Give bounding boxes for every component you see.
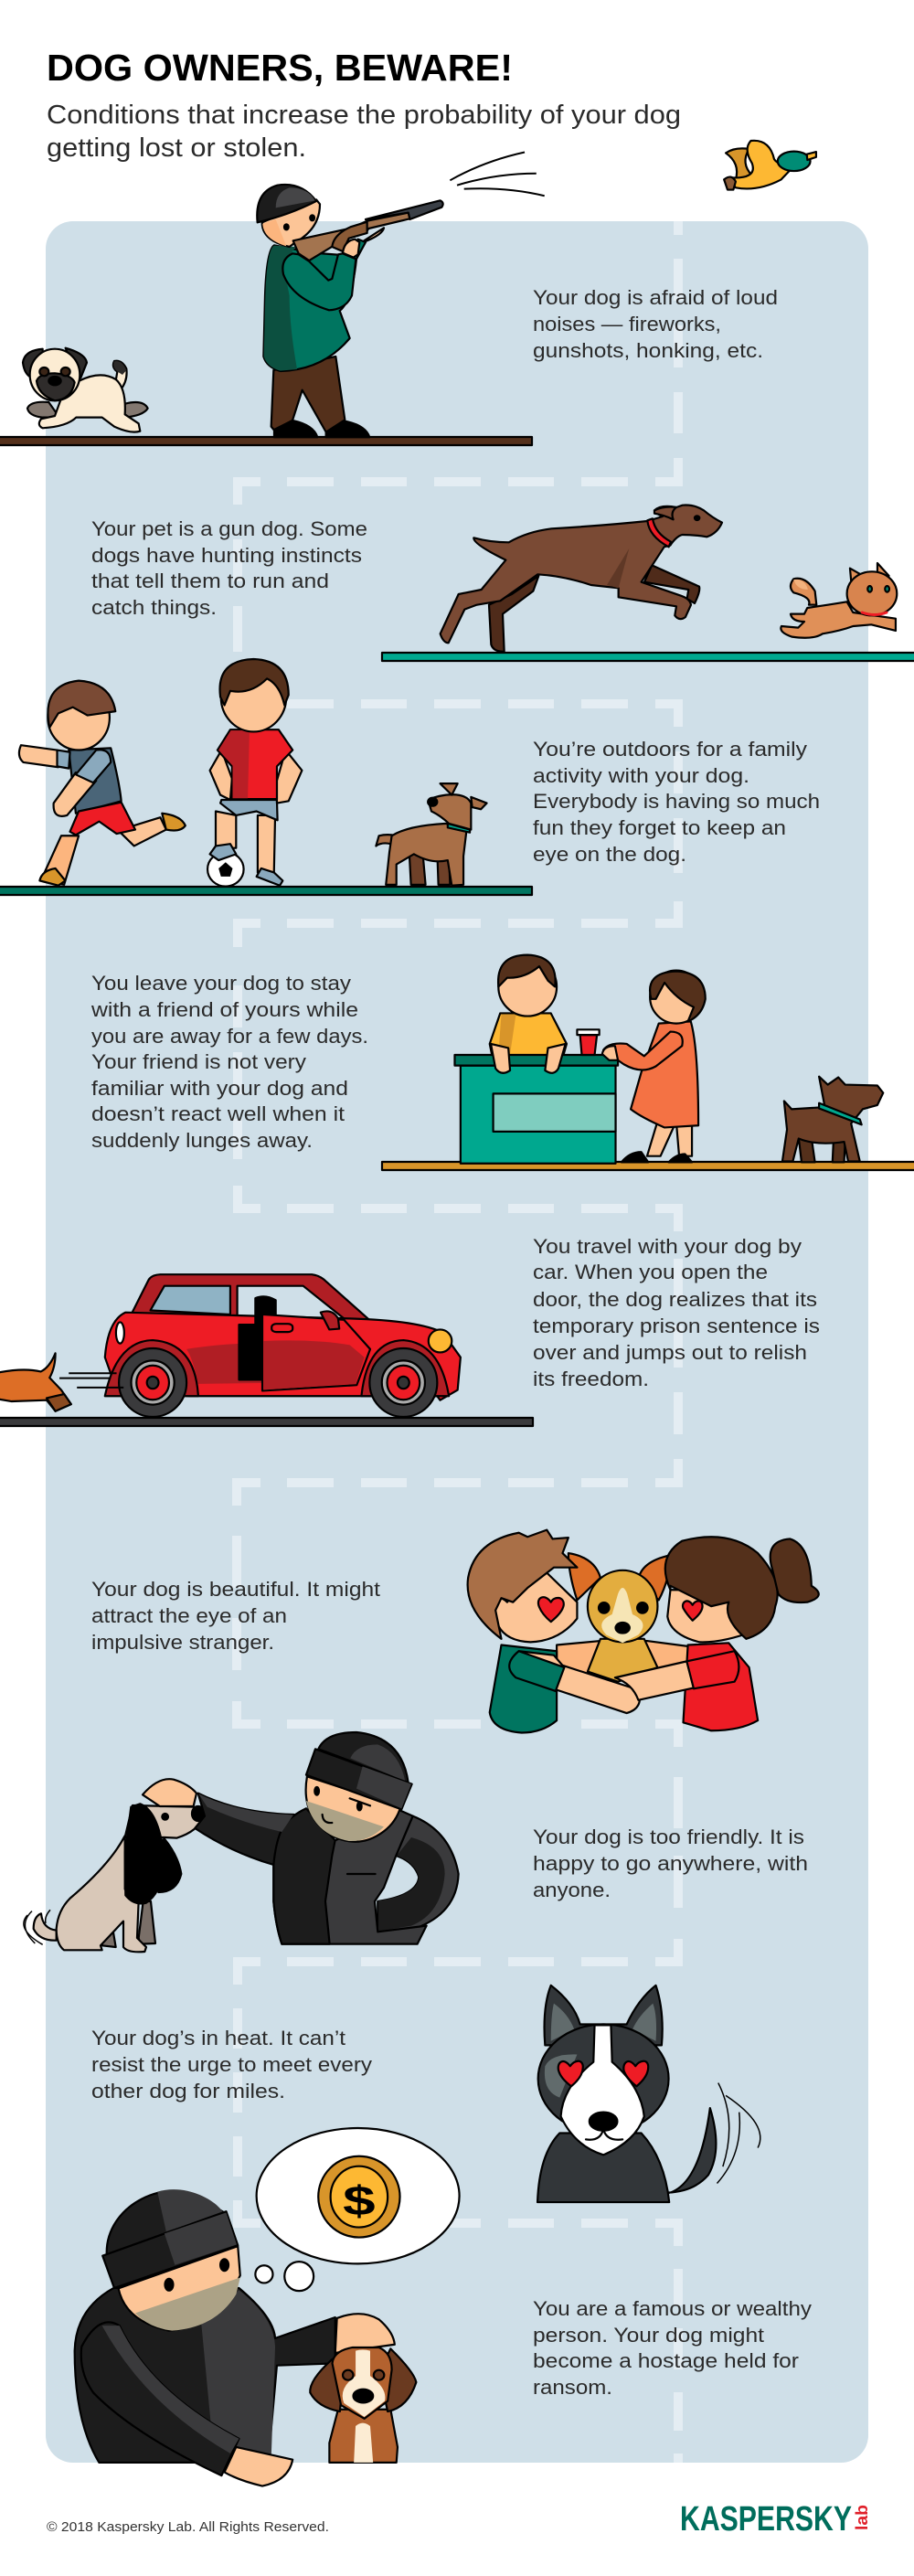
illustration: brown dog with teal collar — [782, 1077, 883, 1162]
text: friend dog sitting: with a friend of yours while — [90, 998, 358, 1021]
text: famous owner: become a hostage held for — [533, 2349, 799, 2372]
illustration: brown dog looking up — [376, 783, 487, 886]
text: famous owner: ransom. — [533, 2376, 612, 2399]
text: famous owner: person. Your dog might — [533, 2324, 764, 2347]
text: friend dog sitting: you are away for a few days. — [91, 1025, 368, 1048]
text: loud noises: Your dog is afraid of loud — [533, 286, 778, 309]
title: DOG OWNERS, BEWARE! — [47, 47, 513, 89]
text: friendly dog: Your dog is too friendly. It is — [533, 1826, 804, 1848]
text: travel by car: door, the dog realizes that its — [533, 1288, 817, 1311]
background panel — [46, 221, 868, 2463]
logo: Kaspersky Lab: KASPERSKY — [680, 2500, 852, 2539]
text: gun dog: Your pet is a gun dog. Some — [91, 517, 367, 540]
illustration: thief with hand on dog — [75, 2189, 395, 2486]
illustration: reception counter scene — [454, 955, 706, 1164]
text: famous owner — [533, 2297, 812, 2399]
illustration: red car with open door — [105, 1274, 461, 1417]
text: dog in heat — [91, 2027, 372, 2102]
illustration: hunter with shotgun — [257, 185, 443, 437]
illustration: fleeing cat — [781, 563, 897, 638]
subtitle: getting lost or stolen. — [47, 133, 306, 163]
shelf 3 — [0, 887, 532, 895]
shelf 5 — [0, 1418, 533, 1426]
icon: husky tail wag lines — [717, 2083, 760, 2183]
text: travel by car: over and jumps out to relish — [533, 1341, 807, 1364]
text: dog in heat: resist the urge to meet every — [91, 2053, 372, 2076]
illustration: frightened pug — [23, 348, 148, 432]
text: loud noises — [533, 286, 778, 362]
illustration: dachshund running away — [0, 1353, 71, 1411]
subtitle — [47, 101, 681, 163]
illustration: thief petting the dog — [195, 1732, 459, 1944]
icon: shot motion lines — [450, 153, 545, 196]
shelf 2 — [382, 653, 914, 661]
shelf 1 — [0, 437, 532, 445]
text: friendly dog: happy to go anywhere, with — [533, 1852, 808, 1875]
text: friend dog sitting: You leave your dog to stay — [91, 972, 351, 995]
illustration: thought bubble with dollar coin — [255, 2128, 460, 2291]
illustration: couple admiring a dog — [468, 1530, 819, 1733]
text: gun dog: that tell them to run and — [91, 569, 329, 592]
logo: Kaspersky Lab: lab — [853, 2505, 871, 2530]
text: friendly dog — [533, 1826, 808, 1901]
text: friend dog sitting — [90, 972, 368, 1152]
text: travel by car — [533, 1235, 820, 1390]
illustration: running gun dog — [441, 506, 722, 652]
illustration: husky with heart eyes — [537, 1985, 716, 2202]
text: family activity: Everybody is having so much — [533, 790, 820, 813]
text: loud noises: gunshots, honking, etc. — [533, 339, 763, 362]
text: family activity: eye on the dog. — [533, 843, 686, 866]
text: travel by car: car. When you open the — [533, 1261, 768, 1283]
text: beautiful dog — [91, 1578, 380, 1654]
text: gun dog — [91, 517, 367, 619]
text: family activity: You’re outdoors for a family — [533, 738, 807, 761]
illustration: boy running — [19, 681, 186, 886]
text: family activity — [533, 738, 820, 866]
illustration: thought bubble with dollar coin: $ — [343, 2177, 376, 2224]
illustration: flying duck — [724, 141, 816, 190]
text: family activity: activity with your dog. — [533, 764, 749, 787]
text: beautiful dog: attract the eye of an — [91, 1604, 287, 1627]
subtitle: Conditions that increase the probability of your dog — [47, 101, 681, 130]
text: dog in heat: other dog for miles. — [91, 2080, 285, 2102]
text: famous owner: You are a famous or wealthy — [533, 2297, 812, 2320]
illustration: friendly dog being petted — [34, 1779, 204, 1952]
text: gun dog: catch things. — [91, 596, 217, 619]
text: beautiful dog: Your dog is beautiful. It might — [91, 1578, 380, 1601]
text: gun dog: dogs have hunting instincts — [91, 544, 362, 567]
text: friend dog sitting: familiar with your dog and — [91, 1077, 348, 1100]
copyright: © 2018 Kaspersky Lab. All Rights Reserved. — [47, 2519, 329, 2535]
shelf 4 — [382, 1162, 914, 1170]
dashed route — [232, 221, 683, 2463]
text: friendly dog: anyone. — [533, 1879, 611, 1901]
text: travel by car: temporary prison sentence is — [533, 1315, 820, 1337]
text: friend dog sitting: suddenly lunges away. — [91, 1129, 313, 1152]
text: travel by car: its freedom. — [533, 1368, 649, 1390]
text: beautiful dog: impulsive stranger. — [91, 1631, 274, 1654]
text: travel by car: You travel with your dog by — [533, 1235, 802, 1258]
text: friend dog sitting: Your friend is not very — [91, 1050, 306, 1073]
icon: car speed lines — [59, 1373, 123, 1388]
text: family activity: fun they forget to keep an — [533, 816, 786, 839]
text: dog in heat: Your dog’s in heat. It can’t — [91, 2027, 345, 2049]
illustration: beagle under hand — [310, 2347, 416, 2463]
illustration: boy with football — [207, 659, 302, 887]
icon: dog tail wag lines — [24, 1910, 50, 1944]
text: loud noises: noises — fireworks, — [533, 313, 721, 335]
text: friend dog sitting: doesn’t react well when it — [91, 1102, 345, 1125]
